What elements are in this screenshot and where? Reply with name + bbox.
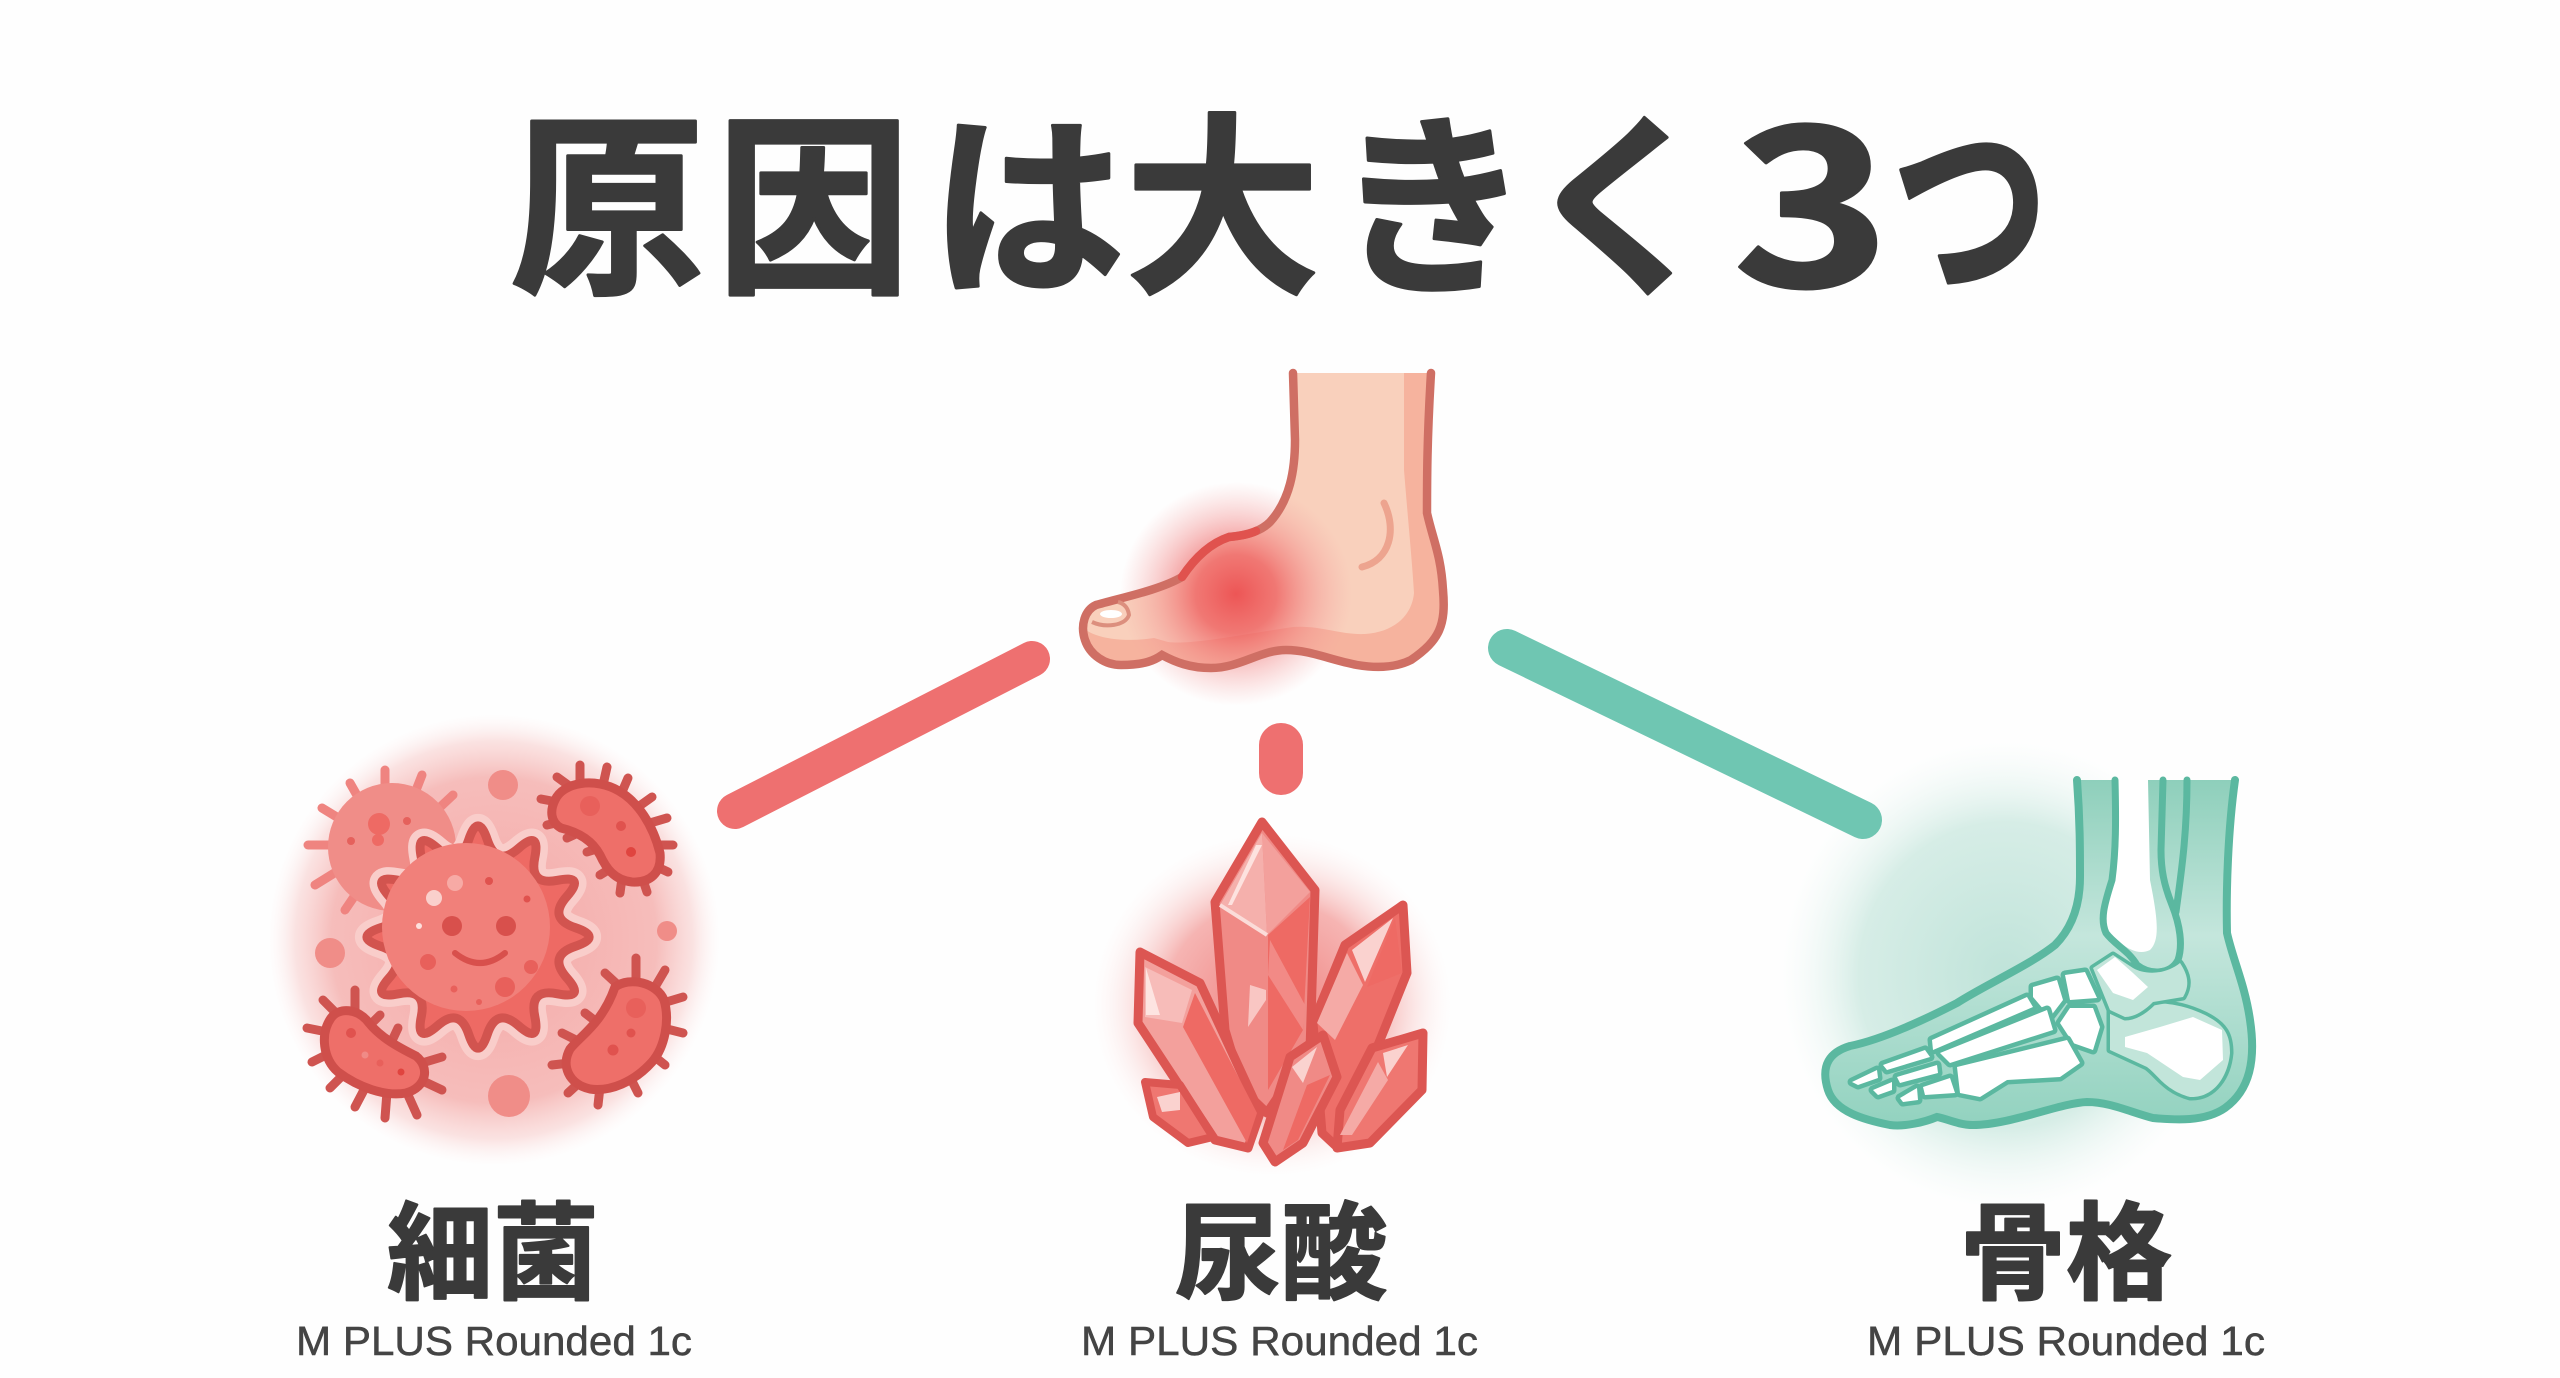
column label: bacteria: 細菌 xyxy=(387,1168,599,1322)
icon: foot skeleton xyxy=(1780,740,2252,1210)
left crystal xyxy=(1138,952,1260,1148)
column label: skeleton: M PLUS Rounded 1c xyxy=(1867,1318,2265,1364)
icon: uric acid crystals xyxy=(1092,822,1452,1177)
bacterium: bottom left xyxy=(307,990,442,1118)
small far-left crystal xyxy=(1145,1082,1213,1143)
tibia and fibula xyxy=(2103,780,2187,972)
bacterium: top right xyxy=(541,765,673,893)
title: つ xyxy=(1892,46,2048,342)
small front crystal xyxy=(1263,1035,1337,1162)
connector: foot to bacteria xyxy=(735,659,1032,811)
column label: bacteria: M PLUS Rounded 1c xyxy=(296,1318,692,1364)
column label: bacteria xyxy=(296,1168,692,1364)
tall right crystal xyxy=(1313,905,1407,1147)
column label: uric acid: M PLUS Rounded 1c xyxy=(1081,1318,1478,1364)
title: 3 xyxy=(1733,37,1890,348)
bacterium: bottom right xyxy=(552,958,683,1105)
floating dots xyxy=(315,770,677,1117)
small right crystal xyxy=(1337,1033,1423,1148)
central crystal xyxy=(1215,822,1315,1113)
icon: bacteria xyxy=(268,714,720,1166)
icon: inflamed foot xyxy=(1083,373,1444,706)
foot bones xyxy=(1852,955,2230,1102)
connector: foot to skeleton xyxy=(1507,648,1863,820)
title: 原因は大きく xyxy=(510,53,1719,335)
pale bacterium xyxy=(308,770,456,911)
connector: foot to uric acid xyxy=(1259,723,1303,795)
outer outline xyxy=(1825,780,2252,1125)
column label: skeleton: 骨格 xyxy=(1960,1168,2172,1322)
main bacterium with face xyxy=(367,826,589,1048)
column label: skeleton xyxy=(1867,1168,2265,1364)
column label: uric acid: 尿酸 xyxy=(1175,1168,1387,1322)
column label: uric acid xyxy=(1081,1168,1478,1364)
